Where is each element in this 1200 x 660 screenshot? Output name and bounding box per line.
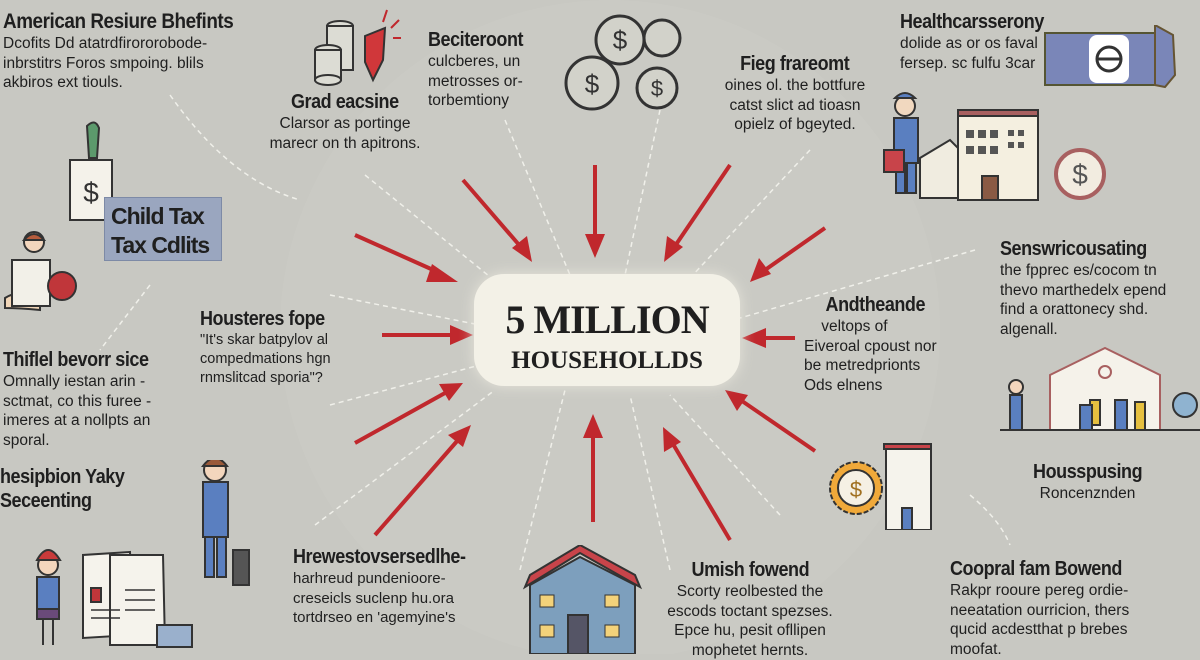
label: Child Tax Credits [104, 197, 222, 261]
text: Umish fowend: escods toctant spezses. [667, 602, 833, 620]
text: Senswricousating: the fpprec es/cocom tn [1000, 262, 1157, 279]
text: Grad eacsine: Clarsor as portinge [280, 115, 410, 132]
text: Hrewestovsersedlhe [293, 546, 466, 626]
text: Coopral fam Bowend: qucid acdestthat p brebes [950, 621, 1128, 638]
icon: gear coin and building [829, 443, 932, 530]
text: Beciteroont: culcberes, un [428, 53, 520, 70]
text: Housteres fope: "It's skar batpylov al [200, 332, 328, 348]
text: Senswricousating: find a orattonecy shd. [1000, 301, 1148, 318]
text: Hesipbion Yaky Seceenting: Seceenting [0, 490, 92, 512]
center: 5 million households: 5 MILLION [505, 297, 709, 342]
label: Child Tax Credits: Tax Cdlits [111, 232, 209, 258]
icon: gear coin and building: $ [850, 477, 862, 502]
text: Thiflel bevorr sice: Omnally iestan arin - [3, 373, 145, 390]
icon: person with document [4, 231, 77, 312]
text: Umish fowend: Scorty reolbested the [677, 583, 823, 600]
icon: dollar coins [564, 14, 682, 110]
text: Grad eacsine: Grad eacsine [291, 91, 399, 113]
text: Healthcarsserony: Healthcarsserony [900, 11, 1044, 33]
text: Thiflel bevorr sice: Thiflel bevorr sice [3, 349, 149, 371]
text: Coopral fam Bowend [950, 558, 1129, 658]
text: American Resiure Bhefints [3, 10, 233, 91]
text: American Resiure Bhefints: inbrstitrs Foros smpoing. blils [3, 55, 204, 72]
icon: coins and megaphone [314, 20, 354, 86]
text: Senswricousating: Senswricousating [1000, 238, 1147, 260]
text: Healthcarsserony: fersep. sc fulfu 3car [900, 54, 1035, 72]
text: Housteres fope: compedmations hgn [200, 351, 331, 367]
text: Beciteroont: metrosses or- [428, 72, 523, 90]
text: Andtheande: veltops of [821, 318, 888, 335]
icon: dollar coins: $ [585, 69, 600, 99]
icon: child with documents and man [35, 460, 250, 648]
label: Child Tax Credits: Child Tax [111, 203, 204, 229]
text: Umish fowend [667, 559, 833, 658]
text: Grad eacsine [270, 91, 420, 152]
text: Senswricousating [1000, 238, 1166, 338]
icon: child tax box: $ [83, 177, 99, 208]
text: Beciteroont: torbemtiony [428, 92, 509, 109]
text: Hrewestovsersedlhe: creseicls suclenp hu.ora [293, 590, 454, 606]
icon: house [523, 545, 642, 654]
text: Senswricousating: algenall. [1000, 320, 1058, 338]
text: Housspusing: Roncenznden [1040, 485, 1135, 502]
icon: worker with building and coin [883, 92, 1106, 201]
center: 5 million households [474, 274, 740, 386]
icon: blue banner [1044, 25, 1176, 88]
text: Healthcarsserony [900, 11, 1044, 72]
text: Healthcarsserony: dolide as or os faval [900, 35, 1038, 52]
text: Hrewestovsersedlhe: Hrewestovsersedlhe- [293, 546, 466, 568]
text: Andtheande: Eiveroal cpoust nor [804, 338, 937, 354]
text: Housspusing [1033, 461, 1142, 502]
text: Hrewestovsersedlhe: tortdrseo en 'agemyine's [293, 609, 455, 626]
icon: worker with building and coin: $ [1072, 159, 1088, 190]
text: Andtheande [804, 294, 937, 394]
text: Fieg frareomt: Fieg frareomt [740, 53, 850, 75]
text: Thiflel bevorr sice [3, 349, 151, 448]
text: Coopral fam Bowend: Rakpr rooure pereg ordie- [950, 582, 1128, 599]
text: Umish fowend: Umish fowend [691, 559, 809, 581]
text: Fieg frareomt [725, 53, 865, 133]
text: Fieg frareomt: opielz of bgeyted. [734, 116, 856, 133]
text: Beciteroont: Beciteroont [428, 29, 523, 51]
text: Andtheande: be metredprionts [804, 357, 920, 374]
text: American Resiure Bhefints: American Resiure Bhefints [3, 10, 233, 33]
text: Thiflel bevorr sice: imeres at a nollpts an [3, 412, 150, 429]
text: Coopral fam Bowend: moofat. [950, 640, 1002, 658]
text: Andtheande: Andtheande [825, 294, 925, 316]
icon: community house [1000, 347, 1200, 431]
text: Thiflel bevorr sice: sctmat, co this furee - [3, 392, 151, 410]
text: Hesipbion Yaky Seceenting [0, 466, 125, 512]
text: Fieg frareomt: oines ol. the bottfure [725, 77, 865, 94]
text: Hesipbion Yaky Seceenting: hesipbion Yaky [0, 466, 124, 488]
text: Grad eacsine: marecr on th apitrons. [270, 134, 420, 152]
text: Hrewestovsersedlhe: harhreud pundenioore- [293, 570, 446, 587]
icon: dollar coins: $ [651, 76, 663, 101]
text: Umish fowend: Epce hu, pesit ofllipen [674, 622, 826, 639]
text: Senswricousating: thevo marthedelx epend [1000, 282, 1166, 298]
text: Coopral fam Bowend: neeatation ourricion, thers [950, 602, 1129, 618]
text: Thiflel bevorr sice: sporal. [3, 432, 50, 448]
text: Beciteroont [428, 29, 524, 109]
text: American Resiure Bhefints: akbiros ext tiouls. [3, 74, 123, 91]
text: Andtheande: Ods elnens [804, 376, 882, 394]
icon: dollar coins: $ [613, 25, 628, 55]
text: American Resiure Bhefints: Dcofits Dd atatrdfirororobode- [3, 35, 207, 52]
icon: child tax box [69, 122, 113, 221]
text: Fieg frareomt: catst slict ad tioasn [730, 96, 860, 114]
text: Umish fowend: mophetet hernts. [692, 642, 808, 658]
text: Housspusing: Housspusing [1033, 461, 1142, 483]
center: 5 million households: HOUSEHOLLDS [511, 347, 703, 374]
text: Housteres fope: Housteres fope [200, 308, 325, 330]
text: Coopral fam Bowend: Coopral fam Bowend [950, 558, 1122, 580]
text: Housteres fope: rnmslitcad sporia"? [200, 370, 323, 386]
text: Housteres fope [200, 308, 331, 386]
